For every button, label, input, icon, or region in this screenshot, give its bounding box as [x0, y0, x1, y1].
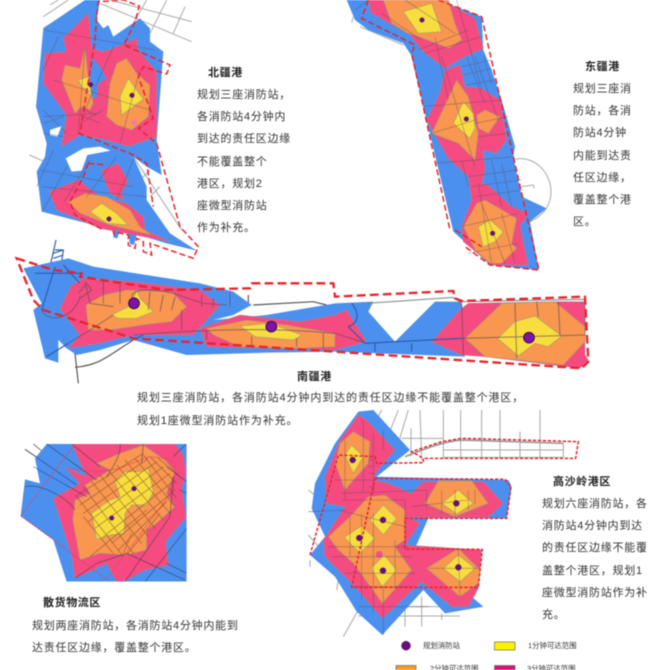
text: 高沙岭港区 description: 的责任区边缘不能覆: [542, 542, 648, 554]
heading: 北疆港: 北疆港: [208, 67, 243, 79]
text: 高沙岭港区 description: 消防站4分钟内到达: [542, 520, 643, 532]
map: 南疆港: [17, 240, 588, 383]
heading: 散货物流区: 散货物流区: [43, 597, 101, 609]
text: 北疆港 description: 各消防站4分钟内: [197, 111, 286, 123]
text: 高沙岭港区 description: 规划六座消防站，各: [542, 498, 648, 510]
text: 北疆港 description: 港区，规划2: [197, 178, 263, 190]
map: 北疆港: [29, 0, 198, 258]
text: 北疆港 description: [196, 88, 291, 234]
heading: 高沙岭港区: 高沙岭港区: [553, 476, 611, 488]
text: 东疆港 description: 规划三座消: [573, 83, 632, 95]
text: 北疆港 description: 到达的责任区边缘: [197, 133, 291, 145]
text: 北疆港 description: 座微型消防站: [197, 200, 268, 212]
legend: magenta swatch: [494, 666, 515, 670]
text: 东疆港 description: [572, 82, 632, 228]
legend label: 规划消防站: 规划消防站: [423, 641, 460, 650]
map: 散货物流区: [21, 444, 187, 582]
heading: 南疆港: 南疆港: [297, 371, 332, 383]
text: 散货物流区 description: 规划两座消防站，各消防站4分钟内能到: [32, 620, 239, 632]
text: 东疆港 description: 覆盖整个港: [573, 194, 632, 206]
text: 东疆港 description: 任区边缘，: [573, 172, 632, 184]
text: 北疆港 description: 作为补充。: [197, 222, 256, 234]
text: 高沙岭港区 description: 盖整个港区，规划1: [542, 565, 643, 577]
text: 高沙岭港区 description: 充。: [542, 609, 566, 621]
text: 散货物流区 description: [32, 619, 239, 654]
legend: yellow swatch: [494, 642, 515, 650]
text: 高沙岭港区 description: 座微型消防站作为补: [542, 587, 648, 599]
legend label: 1分钟可达范围: 1分钟可达范围: [528, 641, 576, 650]
legend: 规划消防站 dot: [402, 641, 410, 650]
legend: orange swatch: [396, 666, 416, 670]
text: 东疆港 description: 区。: [573, 216, 596, 228]
text: 南疆港 description: [136, 391, 524, 427]
text: 东疆港 description: 内能到达责: [573, 150, 632, 162]
map: 高沙岭港区: [308, 410, 578, 637]
text: 东疆港 description: 防站4分钟: [573, 127, 627, 139]
heading: 东疆港: 东疆港: [585, 61, 620, 73]
text: 南疆港 description: 规划1座微型消防站作为补充。: [137, 415, 298, 427]
text: 高沙岭港区 description: [542, 497, 648, 621]
text: 北疆港 description: 不能覆盖整个: [197, 156, 268, 168]
text: 南疆港 description: 规划三座消防站，各消防站4分钟内到达的责任区边缘不能覆盖整个港区，: [137, 392, 524, 404]
text: 北疆港 description: 规划三座消防站，: [197, 89, 291, 101]
map: 东疆港: [347, 0, 551, 270]
text: 东疆港 description: 防站，各消: [573, 105, 632, 117]
text: 散货物流区 description: 达责任区边缘，覆盖整个港区。: [32, 642, 196, 654]
